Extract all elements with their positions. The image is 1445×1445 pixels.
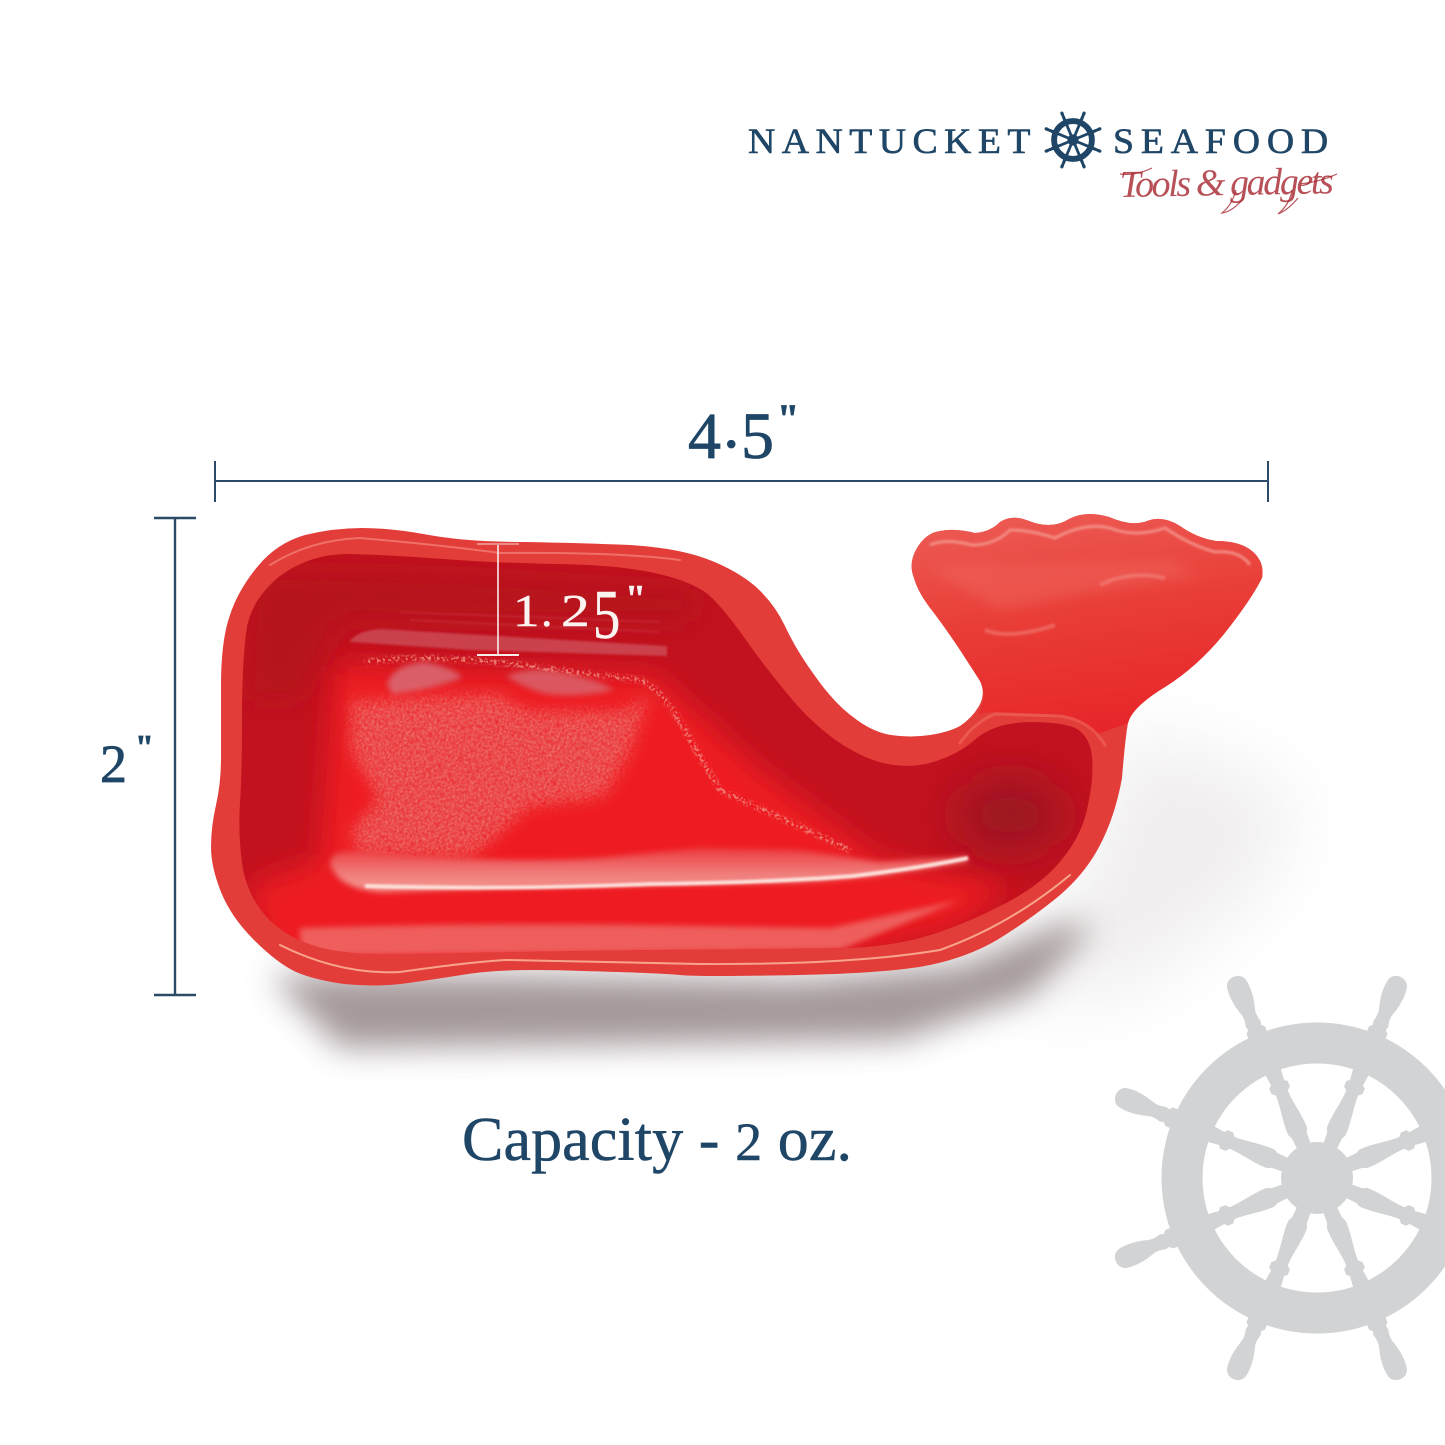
dish outer rim bbox=[211, 514, 1263, 986]
width label: 4 bbox=[688, 400, 721, 473]
height label: " bbox=[135, 729, 154, 766]
faint ribs on upper wall bbox=[400, 612, 660, 632]
glossy ridge band bbox=[330, 848, 968, 892]
logo icon: ship wheel bbox=[1044, 111, 1102, 169]
logo wordmark: Nantucket: NANTUCKET bbox=[748, 121, 1030, 161]
dish basin bbox=[239, 554, 1092, 955]
icon: large grey ship wheel bbox=[1112, 973, 1445, 1383]
speckled floor glaze bbox=[364, 707, 622, 845]
width label: . bbox=[723, 389, 740, 462]
inner depth label: 2 bbox=[561, 586, 590, 637]
inner depth label: " bbox=[625, 578, 646, 620]
tail fluke bbox=[912, 514, 1263, 735]
floor gloss highlights bbox=[387, 662, 462, 694]
inner depth label: 1 bbox=[513, 585, 539, 636]
inner depth label: . bbox=[541, 585, 552, 636]
lower wall sheen bbox=[300, 900, 960, 956]
rim highlight lines bbox=[270, 538, 1105, 972]
inner depth label bbox=[513, 576, 646, 654]
logo tagline: Tools & gadgets bbox=[1119, 160, 1334, 206]
logo wordmark: Seafood: SEAFOOD bbox=[1113, 121, 1328, 161]
tail highlights bbox=[930, 526, 1250, 634]
inner depth label: 5 bbox=[593, 576, 620, 654]
tagline script flourishes bbox=[1120, 168, 1337, 214]
width label: 5 bbox=[741, 400, 774, 473]
ridge bright core bbox=[365, 858, 968, 888]
width dimension line bbox=[215, 461, 1268, 502]
inner depth dimension line bbox=[477, 544, 519, 655]
width label: " bbox=[777, 396, 799, 441]
whale dish photo bbox=[211, 514, 1263, 986]
soft shadow beneath dish bbox=[270, 730, 1290, 1048]
capacity caption: Capacity - 2 oz. bbox=[462, 1106, 852, 1174]
height dimension line bbox=[154, 518, 196, 995]
pale ridge at floor edge bbox=[349, 629, 667, 656]
brand logo bbox=[748, 111, 1337, 214]
height label: 2 bbox=[100, 734, 127, 794]
